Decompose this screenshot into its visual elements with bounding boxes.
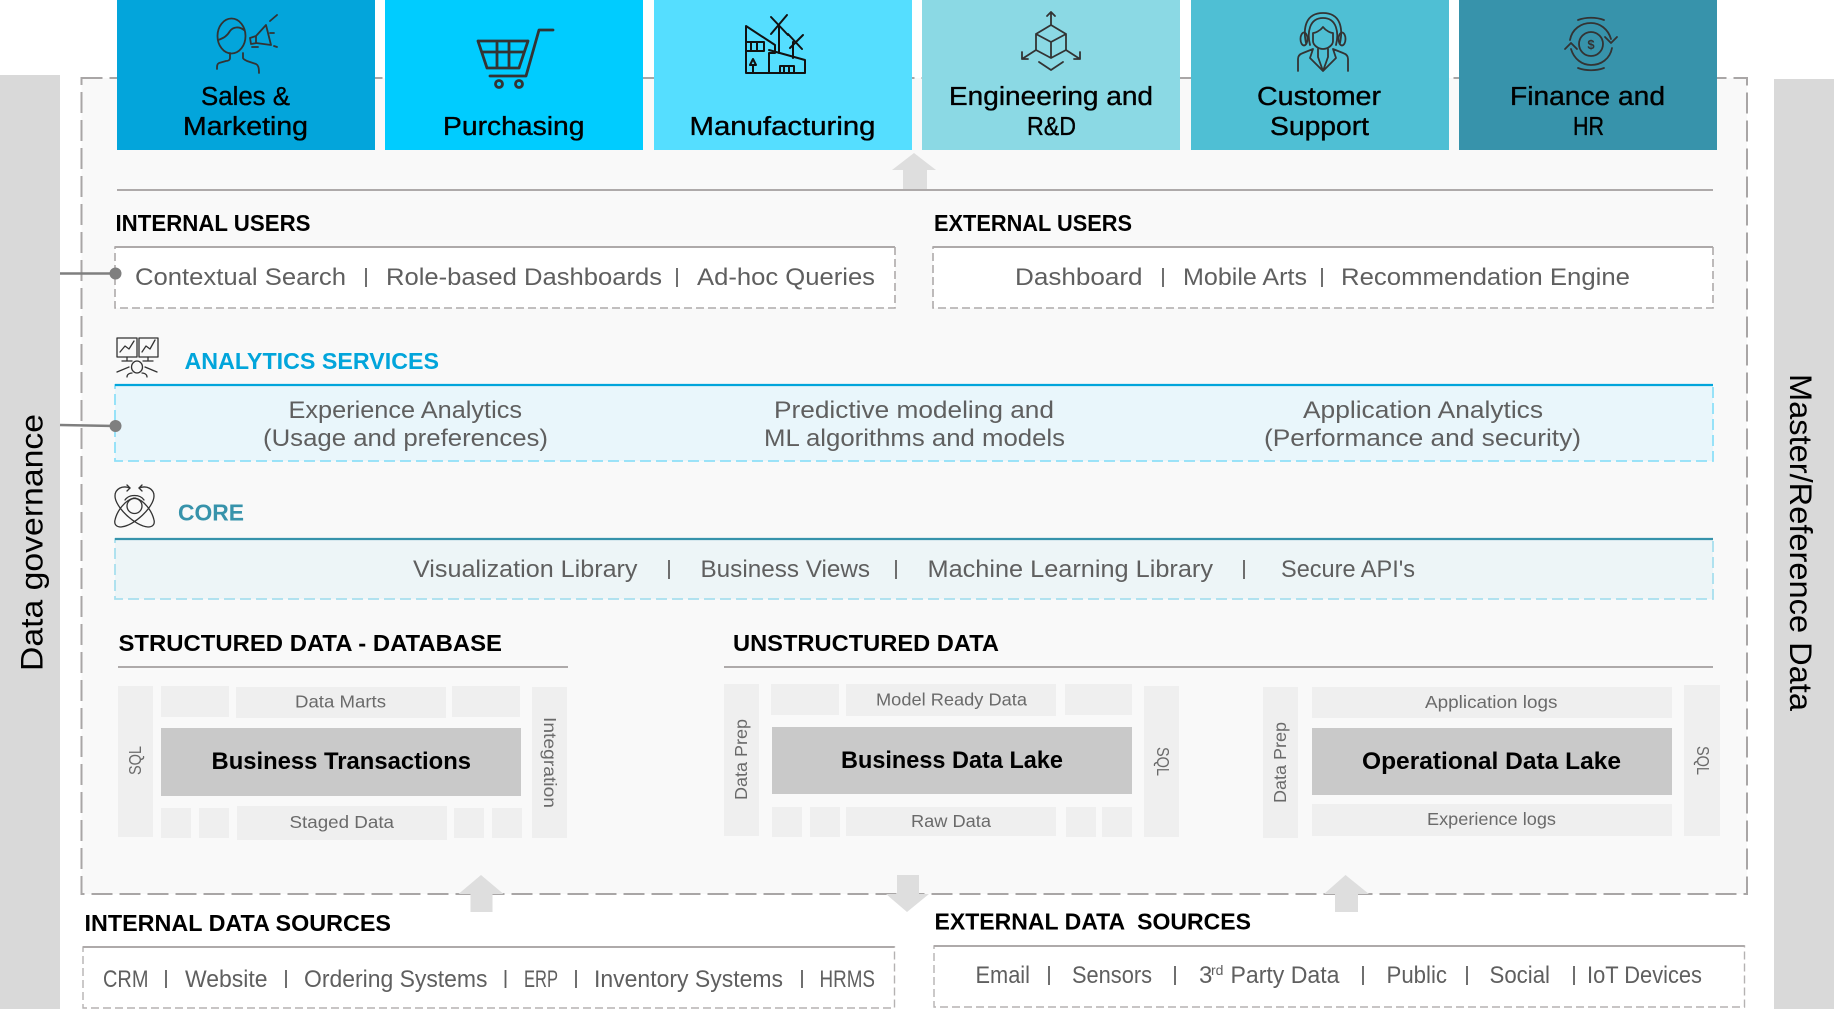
block: operational data lake: Experience logs <box>1427 809 1556 829</box>
icon: support agent with headset <box>1298 13 1348 71</box>
panel: internal data sources <box>83 910 894 1008</box>
heading: core: CORE <box>178 500 244 526</box>
block: business data lake: SQL <box>1153 747 1173 776</box>
arrow: up to business units <box>892 153 936 190</box>
heading: unstructured data: UNSTRUCTURED DATA <box>733 630 999 656</box>
panel: analytics services: Experience Analytics <box>288 397 522 424</box>
tile: purchasing <box>385 0 643 150</box>
block: operational data lake <box>1263 685 1720 838</box>
connector: governance to internal users <box>60 268 122 280</box>
arrow: internal sources up <box>458 875 504 912</box>
arrow: down to external <box>886 875 929 912</box>
panel: external data sources <box>934 908 1744 1007</box>
heading: external data sources: EXTERNAL DATA SOURCES <box>934 908 1251 934</box>
panel: structured data database <box>118 630 568 840</box>
panel: external users: Mobile Arts <box>1183 264 1307 291</box>
tile: manufacturing: Manufacturing <box>690 113 876 141</box>
icon: cube with arrows <box>1022 12 1080 70</box>
tile: sales and marketing: Sales & <box>201 83 290 111</box>
tile: sales and marketing: Marketing <box>183 113 308 141</box>
panel: external data sources: Social <box>1490 962 1550 989</box>
panel: master/reference data sidebar <box>1774 79 1834 1009</box>
panel: external data sources: Sensors <box>1072 962 1152 989</box>
icon: dollar with circular arrows <box>1565 18 1617 70</box>
panel: external data sources: Email <box>976 962 1030 989</box>
panel: core: Business Views <box>700 556 870 583</box>
icon: factory with windmills <box>746 15 805 73</box>
block: operational data lake: Application logs <box>1425 692 1558 712</box>
block: operational data lake: SQL <box>1693 746 1713 775</box>
panel: core: Visualization Library <box>413 556 638 583</box>
heading: analytics services: ANALYTICS SERVICES <box>184 348 439 374</box>
panel: internal users: Role-based Dashboards <box>386 264 662 291</box>
panel: internal data sources: ERP <box>524 966 558 993</box>
icon: person with megaphone <box>217 15 277 73</box>
panel: internal data sources: HRMS <box>820 966 875 993</box>
tile: finance and HR <box>1459 0 1717 150</box>
icon: orbit core <box>115 485 154 527</box>
panel: internal data sources: Website <box>185 966 268 993</box>
panel: external users <box>933 210 1713 308</box>
panel: external data sources: Public <box>1386 962 1447 989</box>
icon: shopping cart <box>478 30 553 88</box>
icon: analyst with monitors <box>117 338 158 377</box>
panel: data governance sidebar: Data governance <box>14 414 50 671</box>
icon: dollar with circular arrows: $ <box>1587 37 1595 52</box>
connector: governance to analytics services <box>60 420 122 432</box>
block: business data lake <box>724 684 1179 837</box>
block: business data lake: Business Data Lake <box>841 747 1063 774</box>
heading: structured data: STRUCTURED DATA - DATABASE <box>118 630 502 656</box>
tile: finance and HR: Finance and <box>1510 83 1665 111</box>
block: operational data lake: Data Prep <box>1270 722 1290 803</box>
panel: master/reference data sidebar: Master/Reference Data <box>1783 374 1819 711</box>
panel: main dashed container <box>82 78 1747 894</box>
panel: analytics services: (Usage and preferences) <box>263 425 548 452</box>
tile: manufacturing <box>654 0 912 150</box>
panel: analytics services: Application Analytics <box>1303 397 1543 424</box>
panel: structured data database: Business Transactions <box>212 748 471 775</box>
tile: engineering and R&D: R&D <box>1027 113 1076 141</box>
tile: customer support: Support <box>1270 113 1369 141</box>
panel: analytics services <box>115 338 1713 461</box>
panel: internal users <box>115 210 895 308</box>
panel: core: Machine Learning Library <box>928 556 1213 583</box>
tile: customer support: Customer <box>1257 83 1382 111</box>
block: operational data lake: Operational Data Lake <box>1362 748 1621 775</box>
heading: internal users: INTERNAL USERS <box>116 210 310 236</box>
panel: external users: Recommendation Engine <box>1341 264 1630 291</box>
panel: external data sources: IoT Devices <box>1587 962 1702 989</box>
tile: sales and marketing <box>117 0 375 150</box>
block: business data lake: Raw Data <box>911 811 991 831</box>
panel: structured data database: Integration <box>540 717 560 808</box>
panel: structured data database: SQL <box>125 746 145 775</box>
tile: finance and HR: HR <box>1573 113 1604 141</box>
arrow: external sources up <box>1324 875 1369 912</box>
heading: external users: EXTERNAL USERS <box>934 210 1132 236</box>
panel: external data sources: Party Data <box>1230 962 1340 989</box>
panel: external data sources: rd <box>1211 962 1223 978</box>
panel: internal data sources: Inventory Systems <box>594 966 783 993</box>
panel: core: Secure API's <box>1281 556 1415 583</box>
panel: analytics services: Predictive modeling and <box>774 397 1054 424</box>
panel: external users: Dashboard <box>1015 264 1142 291</box>
block: business data lake: Data Prep <box>731 719 751 800</box>
tile: customer support <box>1191 0 1449 150</box>
panel: data governance sidebar <box>0 75 60 1009</box>
tile: engineering and R&D <box>922 0 1180 150</box>
panel: analytics services: (Performance and security) <box>1264 425 1581 452</box>
tile: purchasing: Purchasing <box>443 113 584 141</box>
panel: internal users: Contextual Search <box>135 264 346 291</box>
panel: internal users: Ad-hoc Queries <box>697 264 875 291</box>
panel: structured data database: Staged Data <box>290 812 394 832</box>
block: business data lake: Model Ready Data <box>876 690 1027 710</box>
panel: internal data sources: Ordering Systems <box>304 966 488 993</box>
tile: engineering and R&D: Engineering and <box>949 83 1153 111</box>
panel: unstructured data <box>724 630 1720 838</box>
panel: structured data database: Data Marts <box>295 692 386 712</box>
panel: analytics services: ML algorithms and models <box>764 425 1065 452</box>
panel: internal data sources: CRM <box>103 966 148 993</box>
heading: internal data sources: INTERNAL DATA SOURCES <box>84 910 391 936</box>
panel: core <box>115 485 1713 599</box>
panel: external data sources: 3 <box>1199 962 1212 989</box>
